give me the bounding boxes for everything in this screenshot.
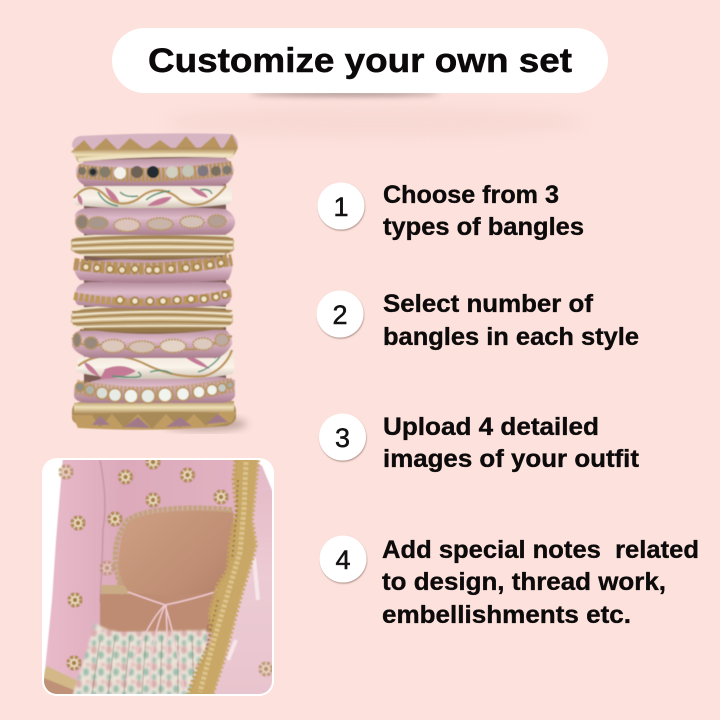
bangle 5: thread band: [71, 232, 234, 260]
bangle 10: white painted band: [76, 349, 234, 379]
number badge 3: [319, 414, 366, 460]
step 2 text: [383, 290, 639, 351]
neckline trim: [115, 508, 232, 594]
gold fringe: [188, 456, 258, 698]
step 1: [318, 181, 584, 241]
number badge 1: [318, 182, 364, 230]
heading pill: [112, 28, 608, 138]
embroidered flowers: [60, 456, 272, 675]
step 4 text: embellishments etc.: [382, 601, 631, 629]
bangle stack photo: [71, 133, 247, 431]
bangle 2: mirror band: [76, 157, 234, 186]
step 2 text: bangles in each style: [383, 323, 639, 351]
number badge 4: [320, 536, 366, 582]
back tie strings: [126, 592, 215, 690]
outfit photo panel: [40, 456, 276, 698]
step 3: [319, 413, 640, 473]
bangle 9: pink leaf band: [72, 328, 232, 358]
step 1 text: Choose from 3: [383, 181, 559, 209]
step 4 text: [382, 536, 699, 629]
step 3 text: Upload 4 detailed: [383, 413, 599, 441]
bangle 4: pink leaf band: [75, 207, 235, 235]
step 1 text: types of bangles: [383, 213, 584, 241]
title: Customize your own set: [148, 42, 572, 80]
step 1 text: [383, 181, 584, 241]
bangle 12: gold base: [72, 400, 236, 430]
step 4 text: Add special notes related: [382, 536, 699, 564]
number badge 2: [316, 290, 364, 338]
printed skirt: [72, 623, 207, 698]
step 4 text: to design, thread work,: [382, 568, 666, 596]
sheer dupatta: [214, 462, 272, 694]
step 3 text: [383, 413, 640, 473]
number badge 2: 2: [332, 300, 348, 330]
step 2: [316, 290, 639, 351]
bare back: [118, 510, 234, 632]
number badge 1: 1: [333, 192, 349, 222]
bangle 6: sequin and pink band: [74, 258, 232, 283]
number badge 3: 3: [335, 423, 350, 453]
blouse: [44, 460, 238, 694]
bangle 3: white painted band: [74, 185, 232, 208]
bangle 8: thread band: [71, 304, 233, 334]
step 4: [320, 536, 699, 629]
number badge 4: 4: [335, 545, 351, 575]
step 2 text: Select number of: [383, 290, 594, 318]
step 3 text: images of your outfit: [383, 445, 640, 473]
bangle 7: pink sequin band: [74, 282, 232, 308]
sleeve seam: [100, 460, 105, 602]
bangle 11: mirror band: [74, 375, 235, 403]
lower arm: [44, 678, 74, 694]
bangle 1: top gold band: [71, 133, 238, 162]
